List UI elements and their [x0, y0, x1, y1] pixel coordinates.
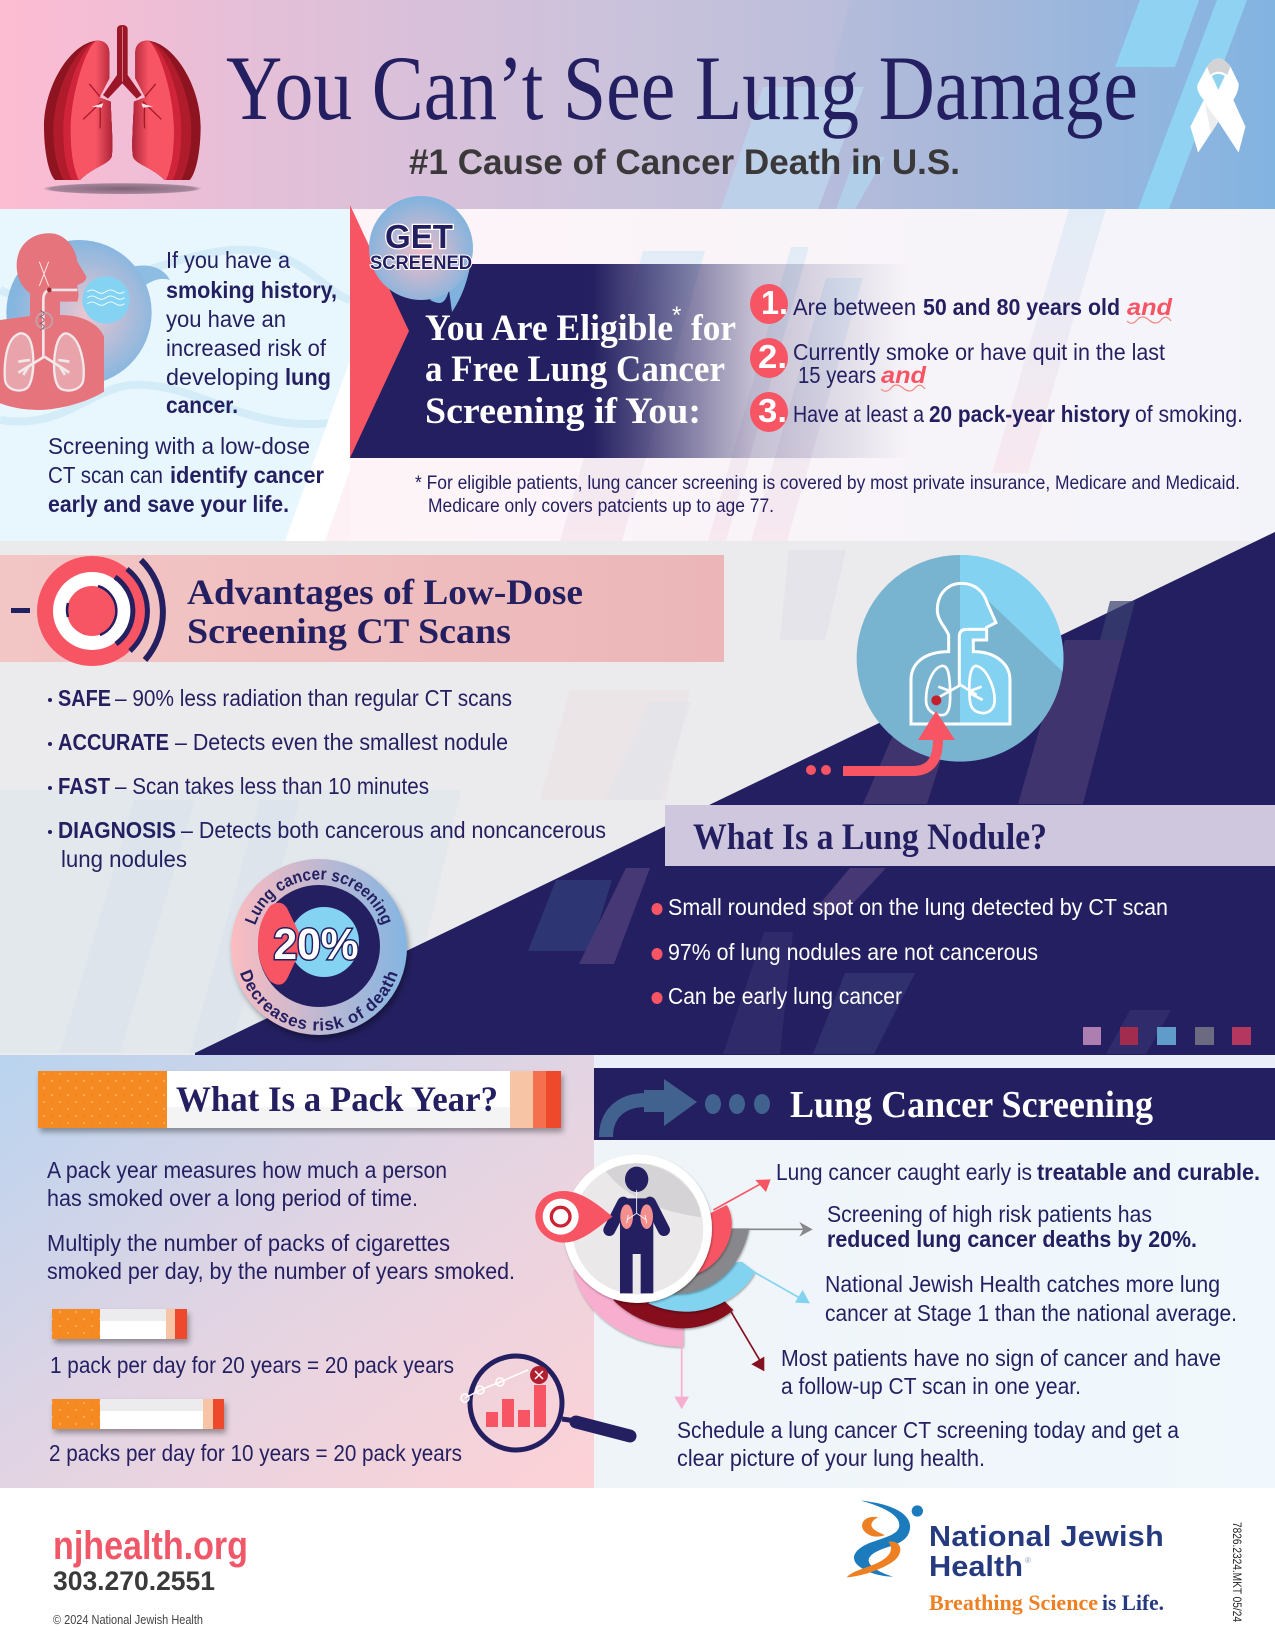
icon: ribbon	[1190, 58, 1245, 153]
text: screening facts: Screening of high risk patients has	[827, 1201, 1152, 1227]
text: screening facts: treatable and curable.	[1037, 1159, 1260, 1185]
get screened bubble: GET	[385, 218, 453, 255]
heading: lung nodule: What Is a Lung Nodule?	[693, 817, 1047, 858]
badge: 20 percent: Lung cancer screening	[244, 870, 391, 925]
title: You Can’t See Lung Damage	[226, 37, 1138, 139]
text: pack year definition: Multiply the number of packs of cigarettes	[47, 1230, 450, 1256]
panel: pack year	[0, 1055, 594, 1488]
contact	[53, 1524, 248, 1627]
logo: Health	[929, 1551, 1023, 1583]
cigarette heading	[38, 1071, 561, 1128]
text: pack year definition: smoked per day, by the number of years smoked.	[47, 1258, 515, 1284]
criterion 3: 3.	[758, 392, 787, 429]
list: advantages: DIAGNOSIS	[58, 817, 176, 843]
list: nodule facts	[652, 894, 1168, 1009]
badge: 20 percent: 20%	[274, 920, 358, 969]
list: nodule facts: 97% of lung nodules are not cancerous	[668, 939, 1038, 965]
get screened bubble: SCREENED	[370, 253, 472, 274]
icon: person with arcs	[535, 1154, 813, 1409]
cigarette: two packs	[52, 1399, 224, 1429]
icon: nodule circle	[857, 555, 1064, 762]
criterion 1	[750, 284, 1173, 324]
list: advantages: SAFE	[58, 685, 111, 711]
text: screening facts	[677, 1159, 1260, 1471]
red arrow	[350, 205, 409, 458]
logo: is Life.	[1102, 1590, 1164, 1615]
contact: 303.270.2551	[53, 1566, 215, 1596]
logo	[847, 1501, 1164, 1615]
text: smoking history: cancer.	[166, 392, 238, 418]
footer	[0, 1488, 1275, 1650]
contact: njhealth.org	[53, 1524, 248, 1568]
criterion 3: of smoking.	[1135, 401, 1243, 427]
text: screening facts: clear picture of your lung health.	[677, 1445, 985, 1471]
panel: advantages and nodule background	[0, 532, 1275, 1055]
decorative squares	[1083, 1027, 1251, 1045]
list: advantages: FAST	[58, 773, 110, 799]
cigarette heading: What Is a Pack Year?	[176, 1079, 498, 1119]
icon: target with waves	[11, 556, 163, 666]
navy banner	[350, 264, 910, 458]
panel: intro left	[0, 209, 350, 541]
icon: person breathing	[0, 233, 170, 410]
eligibility heading: a Free Lung Cancer	[425, 349, 725, 390]
job code: 7826.2324.MKT 05/24	[1230, 1522, 1244, 1622]
text: low-dose CT: early and save your life.	[48, 491, 289, 517]
text: smoking history: developing	[166, 364, 279, 390]
criterion 1: 50 and 80 years old	[923, 294, 1120, 320]
text: screening facts: cancer at Stage 1 than the national average.	[825, 1300, 1237, 1326]
text: smoking history: increased risk of	[166, 335, 327, 361]
criterion 2: 2.	[758, 338, 787, 375]
subtitle: #1 Cause of Cancer Death in U.S.	[409, 143, 960, 182]
criterion 3	[750, 392, 1243, 432]
text: low-dose CT	[48, 433, 324, 517]
list: advantages: – Detects even the smallest nodule	[175, 729, 508, 755]
criterion 3: 20 pack-year history	[929, 401, 1130, 427]
footnote: Medicare only covers patcients up to age 77.	[428, 496, 774, 517]
get screened bubble	[369, 196, 473, 312]
example: one pack: 1 pack per day for 20 years = 20 pack years	[50, 1352, 454, 1378]
heading: advantages: Advantages of Low-Dose	[187, 572, 583, 612]
list: advantages: – Scan takes less than 10 minutes	[115, 773, 429, 799]
badge: 20 percent: Decreases risk of death	[240, 969, 398, 1031]
heading band: advantages	[0, 555, 724, 666]
list: advantages: ACCURATE	[58, 729, 169, 755]
criterion 2: and	[881, 362, 927, 388]
text: smoking history: If you have a	[166, 247, 290, 273]
footnote	[415, 473, 1240, 517]
text: pack year definition: A pack year measures how much a person	[47, 1157, 447, 1183]
eligibility heading: *	[672, 302, 681, 329]
text: low-dose CT: Screening with a low-dose	[48, 433, 310, 459]
badge: 20 percent	[230, 859, 412, 1041]
heading: advantages: Screening CT Scans	[187, 611, 511, 651]
eligibility heading: You Are Eligible	[425, 308, 673, 349]
text: screening facts: Schedule a lung cancer CT screening today and get a	[677, 1417, 1179, 1443]
icon: magnifier chart	[461, 1356, 630, 1450]
list: advantages	[48, 685, 606, 872]
heading bar: Lung Cancer Screening	[790, 1084, 1153, 1126]
header panel	[0, 0, 1275, 209]
logo: ®	[1025, 1556, 1031, 1565]
panel: lung cancer screening	[535, 1055, 1275, 1488]
eligibility heading: Screening if You:	[425, 391, 701, 432]
text: smoking history: smoking history,	[166, 277, 337, 303]
criterion 3: Have at least a	[793, 401, 924, 427]
heading: advantages	[187, 572, 583, 651]
text: screening facts: reduced lung cancer deaths by 20%.	[827, 1226, 1197, 1252]
eligibility heading: for	[691, 308, 736, 349]
criterion 1: Are between	[793, 294, 916, 320]
heading: lung nodule	[665, 805, 1275, 866]
list: advantages: – Detects both cancerous and noncancerous	[181, 817, 606, 843]
text: pack year definition	[47, 1157, 515, 1284]
list: nodule facts: Can be early lung cancer	[668, 983, 902, 1009]
text: screening facts: Most patients have no sign of cancer and have	[781, 1345, 1221, 1371]
text: screening facts: National Jewish Health catches more lung	[825, 1271, 1220, 1297]
criterion 1: and	[1127, 294, 1173, 320]
panel: eligibility	[350, 196, 1275, 541]
logo: National Jewish	[929, 1521, 1164, 1553]
text: smoking history: you have an	[166, 306, 286, 332]
criterion 1: 1.	[761, 284, 788, 321]
list: advantages: lung nodules	[61, 846, 187, 872]
text: low-dose CT: identify cancer	[170, 462, 324, 488]
criterion 2: 15 years	[798, 362, 876, 388]
icon: lungs	[42, 25, 202, 194]
text: smoking history: lung	[285, 364, 331, 390]
criterion 2	[750, 338, 1166, 391]
heading bar	[594, 1068, 1275, 1140]
eligibility heading	[425, 302, 736, 432]
criterion 2: Currently smoke or have quit in the last	[793, 339, 1166, 365]
cigarette: one pack	[52, 1309, 187, 1339]
contact: © 2024 National Jewish Health	[53, 1612, 203, 1627]
text: screening facts: Lung cancer caught early is	[776, 1159, 1032, 1185]
list: nodule facts: Small rounded spot on the lung detected by CT scan	[668, 894, 1168, 920]
text: pack year definition: has smoked over a long period of time.	[47, 1185, 418, 1211]
list: advantages: – 90% less radiation than regular CT scans	[115, 685, 512, 711]
text: low-dose CT: CT scan can	[48, 462, 163, 488]
text: smoking history	[166, 247, 337, 418]
text: screening facts: a follow-up CT scan in one year.	[781, 1373, 1081, 1399]
example: two packs: 2 packs per day for 10 years = 20 pack years	[49, 1440, 462, 1466]
arrow: to nodule	[806, 711, 955, 775]
logo: Breathing Science	[929, 1590, 1098, 1615]
